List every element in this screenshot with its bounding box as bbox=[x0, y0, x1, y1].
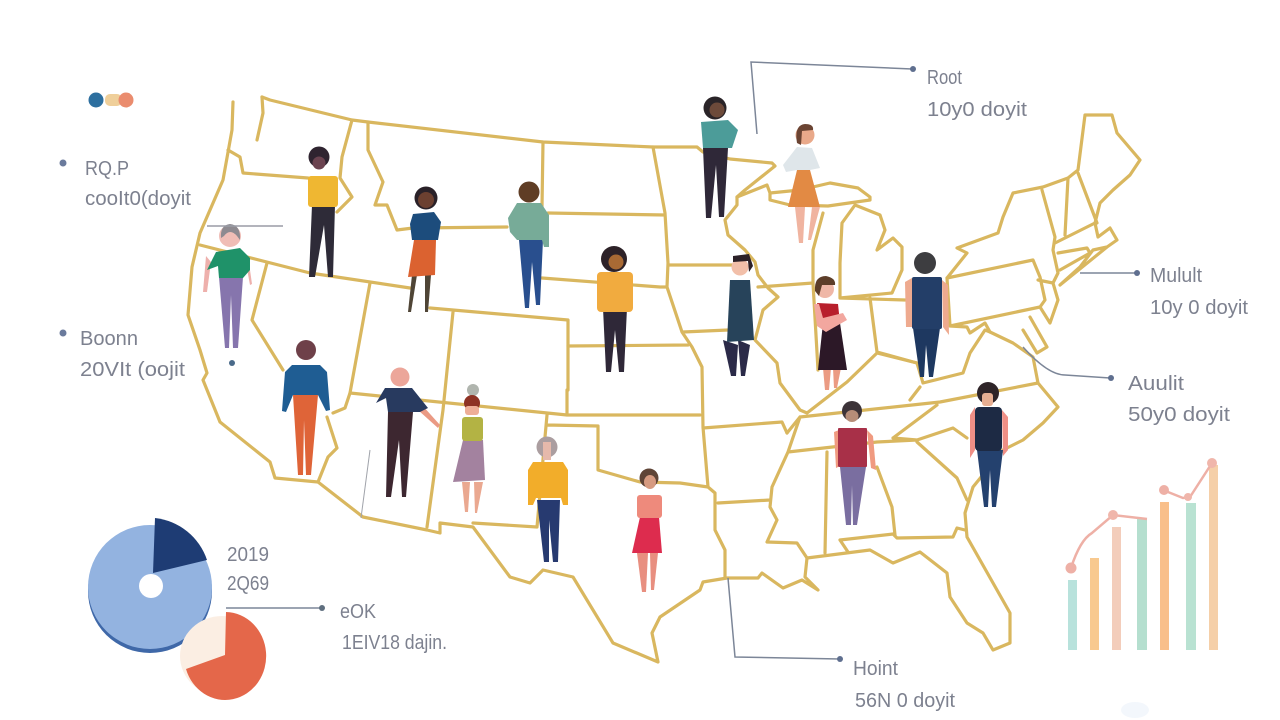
person 16: maroon top bbox=[834, 401, 876, 525]
blue donut chart bbox=[88, 518, 212, 653]
red pie chart bbox=[180, 612, 266, 700]
person 13: olive top, mauve skirt bbox=[453, 384, 485, 513]
person 3: orange skirt bbox=[408, 186, 441, 312]
trend line bbox=[1066, 458, 1217, 574]
callout: middle left: 20VIt (oojit bbox=[80, 359, 185, 381]
person 10: navy vest bbox=[905, 252, 949, 377]
callout: right lower bbox=[1023, 347, 1230, 426]
pie red slice bbox=[186, 612, 266, 700]
donut hole bbox=[139, 574, 163, 598]
plains states bbox=[350, 142, 787, 577]
person 15: red skirt bbox=[632, 468, 662, 592]
callout: right upper: 10y 0 doyit bbox=[1150, 297, 1248, 319]
map outline bbox=[188, 97, 1058, 662]
southern states bbox=[718, 383, 1038, 558]
person 4: sage top bbox=[508, 182, 549, 308]
person 7: orange skirt, white blouse bbox=[783, 124, 820, 243]
callout: right upper: Mulult bbox=[1150, 265, 1202, 287]
pie legend years: 2Q69 bbox=[227, 573, 269, 595]
callout: top left: cooIt0(doyit bbox=[85, 188, 191, 210]
callout: bottom centre bbox=[728, 578, 955, 712]
person 6: teal top bbox=[701, 96, 738, 218]
thin pointer line bbox=[361, 450, 370, 518]
callout: pie: eOK bbox=[340, 601, 377, 623]
person 2: green shirt bbox=[203, 224, 283, 366]
donut shadow bbox=[88, 529, 212, 653]
pie legend years bbox=[227, 544, 269, 595]
person 1: yellow shirt bbox=[308, 146, 338, 277]
pie legend years: 2019 bbox=[227, 544, 269, 566]
bars bbox=[1068, 465, 1218, 650]
callout: top right: 10y0 doyit bbox=[927, 99, 1027, 121]
callout: top left: RQ.P bbox=[85, 158, 129, 180]
donut ring bbox=[88, 525, 212, 649]
person 17: navy vest, jeans bbox=[970, 382, 1008, 507]
callout: top left bbox=[60, 158, 191, 210]
northwest states bbox=[200, 97, 568, 527]
pie cream slice bbox=[180, 616, 264, 696]
callout: right lower: 50y0 doyit bbox=[1128, 404, 1230, 426]
callout: right lower: Auulit bbox=[1128, 373, 1184, 395]
legend dots bbox=[88, 92, 134, 108]
callout: bottom centre: 56N 0 doyit bbox=[855, 690, 955, 712]
US state map bbox=[188, 97, 1140, 662]
callout: right upper bbox=[1080, 265, 1248, 319]
northeast states bbox=[947, 115, 1140, 353]
callout: middle left: Boonn bbox=[80, 328, 138, 350]
callout: top right bbox=[751, 62, 1027, 134]
callout: pie bbox=[226, 601, 447, 654]
person 14: yellow sweater bbox=[528, 436, 568, 562]
person 11: blue sweater bbox=[282, 340, 330, 475]
person 12: navy top, brown trousers bbox=[376, 368, 440, 497]
donut dark wedge bbox=[153, 518, 207, 573]
callout: pie: 1EIV18 dajin. bbox=[342, 632, 447, 654]
great lakes states bbox=[737, 183, 917, 370]
person 9: red top, dark dress bbox=[814, 276, 847, 390]
callout: middle left bbox=[60, 328, 185, 381]
faint bottom mark bbox=[1121, 702, 1149, 718]
person 5: orange sweater bbox=[597, 246, 633, 372]
bar and line chart bbox=[1066, 458, 1218, 650]
callout: bottom centre: Hoint bbox=[853, 658, 898, 680]
callout: top right: Root bbox=[927, 67, 962, 89]
person 8: dark dress bbox=[723, 254, 754, 376]
